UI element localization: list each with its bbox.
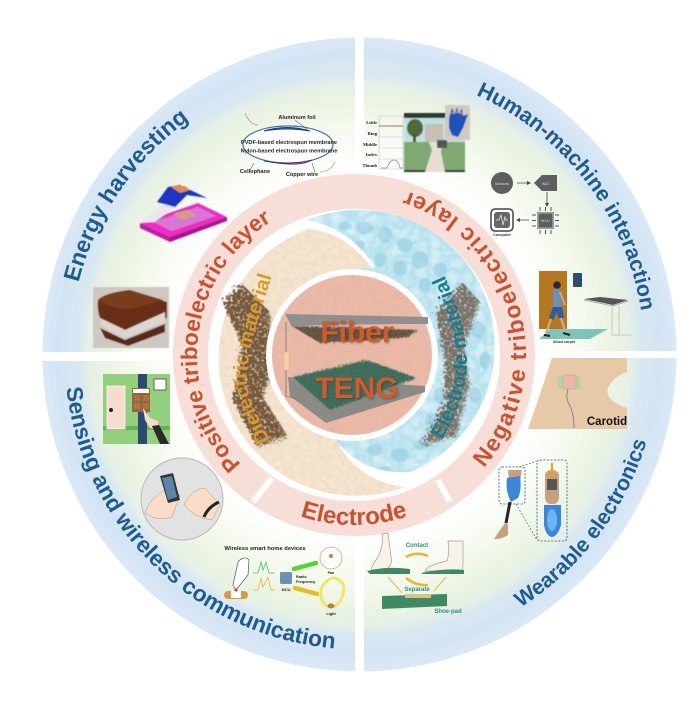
- wire with resistor: [284, 322, 296, 399]
- illustration: wireless smart home devices: Wireless smart home devices: [224, 546, 306, 552]
- illustration: wireless smart home devices: Frequency: [296, 580, 316, 584]
- illustration: finger sensing signals with VR hand: Middle: [363, 142, 377, 147]
- illustration: finger sensing signals with VR hand: Ring: [368, 131, 378, 136]
- illustration: electrospun membrane TENG: [240, 113, 337, 178]
- illustration: smart carpet with person at door: Smart carpet: [553, 340, 576, 344]
- illustration: wireless smart home devices: [224, 546, 344, 616]
- title: Fiber: Fiber: [320, 316, 394, 349]
- flowchart: sensors to computer: [491, 172, 559, 237]
- illustration: wireless smart home devices: MCU: [282, 588, 291, 592]
- illustration: finger sensing signals with VR hand: [362, 105, 470, 172]
- top plate with fibers: [285, 314, 428, 343]
- illustration: magenta flexible device: [140, 185, 227, 242]
- VR scene: [404, 113, 465, 172]
- photo: brown leather wallet: [93, 287, 169, 348]
- flowchart: sensors to computer: Sensors: [495, 182, 509, 186]
- bottom plate with green fibers: [288, 360, 425, 423]
- heading: Human-machine interaction: Human-machine interaction: [477, 82, 652, 310]
- illustration: prosthetic leg: [494, 460, 567, 541]
- panel: electrode material (blue half): [307, 210, 495, 472]
- illustration: electrospun membrane TENG: Aluminum foil: [278, 115, 316, 121]
- heading: Energy harvesting: Energy harvesting: [64, 110, 189, 281]
- title: TENG: TENG: [315, 372, 399, 405]
- illustration: shoe pad contact separate: Separate: [404, 587, 430, 593]
- illustration: neck with carotid sensor: [528, 358, 627, 429]
- illustration: shoe pad contact separate: Shoe-pad: [434, 609, 462, 615]
- illustration: electrospun membrane TENG: PVDF-based electrospun membrane: [241, 140, 337, 146]
- center disc: Fiber TENG: [266, 269, 438, 441]
- label: Dielectric material: Dielectric material: [232, 273, 272, 445]
- ring label: Positive triboelectric layer: Positive triboelectric layer: [180, 211, 268, 474]
- illustration: phone and wristband circle: [141, 458, 223, 540]
- illustration: wireless smart home devices: Fan: [328, 571, 335, 575]
- fiber mat: electrode: [421, 283, 480, 447]
- flowchart: sensors to computer: MCU: [541, 219, 550, 223]
- flowchart: sensors to computer: Computer: [493, 233, 511, 237]
- illustration: finger sensing signals with VR hand: Little: [366, 120, 377, 125]
- flowchart: sensors to computer: ADC: [542, 182, 550, 186]
- heading: Wearable electronics: Wearable electronics: [512, 440, 646, 606]
- illustration: electrospun membrane TENG: Nylon-based electrospun membrane: [241, 148, 337, 154]
- panel: triboelectric ring: [173, 174, 535, 536]
- illustration: shoe pad contact separate: [367, 533, 464, 615]
- illustration: door keypad: [103, 374, 170, 444]
- illustration: smart carpet with person at door: [539, 271, 632, 344]
- ring label: Negative triboelectric layer: Negative triboelectric layer: [402, 192, 526, 467]
- label: Electrode material: Electrode material: [430, 276, 468, 439]
- water droplets texture: [338, 222, 490, 474]
- illustration: finger sensing signals with VR hand: Index: [366, 152, 378, 157]
- illustration: electrospun membrane TENG: Cellophane: [240, 169, 270, 175]
- heading: Sensing and wireless communication: Sensing and wireless communication: [67, 388, 334, 648]
- illustration: electrospun membrane TENG: Copper wire: [286, 172, 318, 178]
- fiber mat: dielectric: [223, 284, 288, 447]
- label: Carotid: Carotid: [587, 416, 627, 428]
- table: [584, 297, 632, 335]
- illustration: wireless smart home devices: Light: [326, 612, 336, 616]
- illustration: wireless smart home devices: Radio: [296, 575, 307, 579]
- blue glove photo: [445, 105, 470, 140]
- illustration: shoe pad contact separate: Contact: [406, 543, 428, 549]
- ring label: Electrode: Electrode: [302, 500, 406, 526]
- panel: dielectric material (tan half): [218, 229, 405, 496]
- illustration: finger sensing signals with VR hand: Thumb: [362, 163, 377, 168]
